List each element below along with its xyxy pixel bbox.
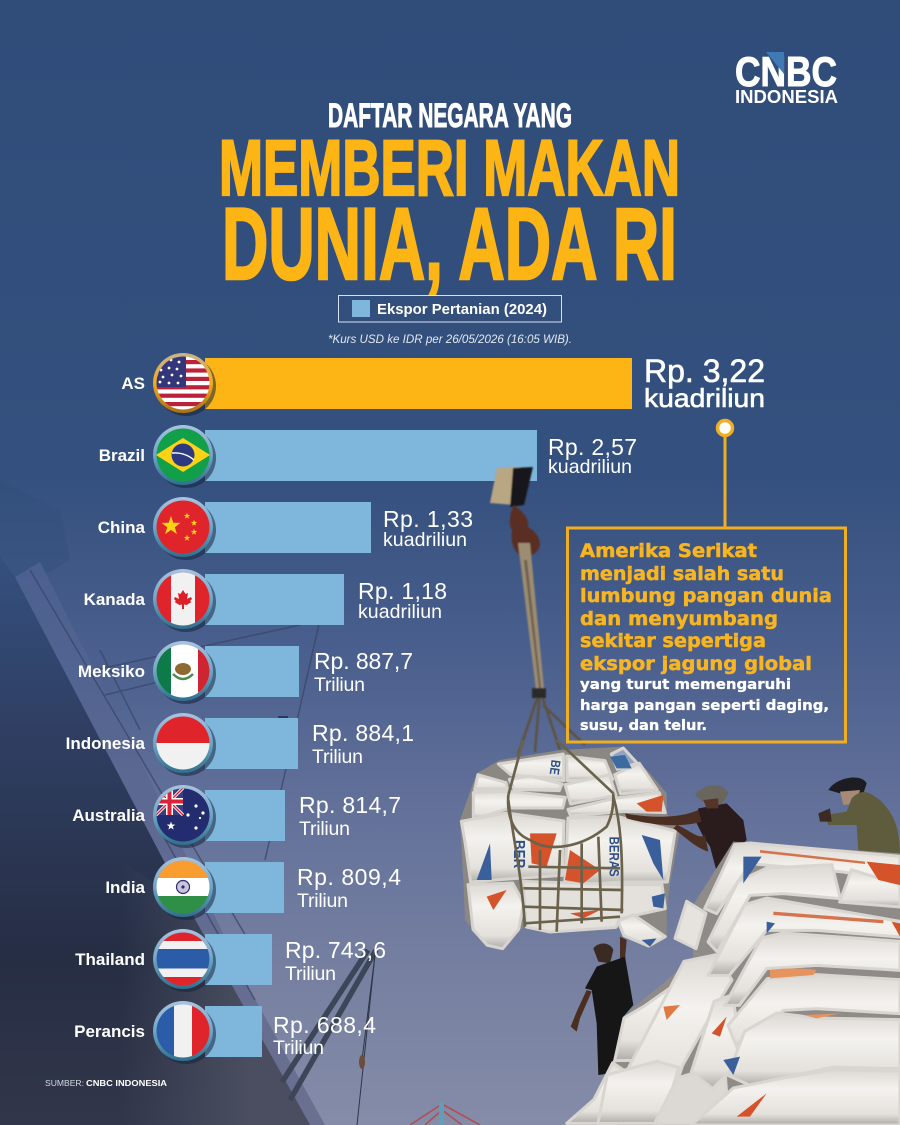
callout: United States note bbox=[568, 528, 846, 742]
values: other countries: Rp. 1,18 bbox=[358, 578, 447, 604]
callout: United States note: ekspor jagung global bbox=[580, 653, 812, 675]
values: other countries: Triliun bbox=[273, 1037, 324, 1059]
values: other countries: Triliun bbox=[285, 963, 336, 985]
title: DAFTAR NEGARA YANG bbox=[328, 97, 572, 135]
source line: SUMBER: bbox=[45, 1078, 84, 1088]
values: other countries: Rp. 814,7 bbox=[299, 792, 401, 818]
values: other countries: Rp. 809,4 bbox=[297, 864, 401, 890]
country labels bbox=[66, 374, 146, 1041]
values: other countries: Rp. 1,33 bbox=[383, 506, 473, 532]
country labels: Australia bbox=[72, 806, 146, 825]
values: other countries: Rp. 743,6 bbox=[285, 937, 386, 963]
values: other countries: kuadriliun bbox=[548, 456, 632, 478]
country labels: Thailand bbox=[75, 950, 145, 969]
country labels: Kanada bbox=[84, 590, 146, 609]
values: other countries: Triliun bbox=[297, 890, 348, 912]
flag: Thailand bbox=[153, 929, 216, 992]
callout: United States note: harga pangan seperti daging, bbox=[580, 698, 829, 714]
source line bbox=[45, 1078, 167, 1088]
country labels: China bbox=[98, 518, 146, 537]
bag printing: BERAS bbox=[606, 837, 622, 877]
flag: China bbox=[153, 497, 216, 560]
country labels: Brazil bbox=[99, 446, 145, 465]
country labels: Perancis bbox=[74, 1022, 145, 1041]
legend bbox=[338, 296, 562, 322]
worker: below load in black bbox=[571, 937, 633, 1075]
value: AS: kuadriliun bbox=[644, 383, 765, 413]
flag: United States bbox=[153, 353, 216, 416]
value: AS bbox=[644, 353, 765, 413]
country labels: India bbox=[105, 878, 146, 897]
bag printing bbox=[477, 755, 665, 947]
worker: centre with grey cap bbox=[625, 785, 747, 872]
logo: CNBC Indonesia: CNBC bbox=[735, 48, 837, 95]
values: other countries: Rp. 884,1 bbox=[312, 720, 414, 746]
values: other countries: kuadriliun bbox=[358, 601, 442, 623]
cargo net bbox=[508, 740, 623, 932]
flag: Australia bbox=[153, 785, 216, 848]
country labels: AS bbox=[121, 374, 145, 393]
values: other countries: Triliun bbox=[312, 746, 363, 768]
bag printing: BER bbox=[510, 840, 527, 868]
callout: United States note: sekitar sepertiga bbox=[580, 630, 766, 652]
logo: CNBC Indonesia: INDONESIA bbox=[735, 87, 838, 107]
photo: dock workers bbox=[571, 778, 900, 1075]
worker: right in khaki bbox=[818, 778, 900, 855]
callout: United States note: dan menyumbang bbox=[580, 608, 778, 630]
values: other countries: Triliun bbox=[314, 674, 365, 696]
country labels: Meksiko bbox=[78, 662, 145, 681]
values: other countries: Triliun bbox=[299, 818, 350, 840]
values: other countries: Rp. 2,57 bbox=[548, 434, 637, 460]
value: AS: Rp. 3,22 bbox=[644, 353, 765, 389]
bag printing: BE bbox=[547, 759, 564, 776]
values: other countries: kuadriliun bbox=[383, 529, 467, 551]
title: MEMBERI MAKAN bbox=[219, 123, 680, 212]
photo: hanging rice sack load bbox=[460, 740, 680, 950]
photo: crane hook and strap bbox=[490, 467, 585, 755]
exchange rate note: *Kurs USD ke IDR per 26/05/2026 (16:05 WIB). bbox=[328, 332, 572, 346]
photo: stacked rice sacks bbox=[567, 842, 900, 1125]
source line: CNBC INDONESIA bbox=[86, 1078, 167, 1088]
flag: Canada bbox=[153, 569, 216, 632]
title bbox=[219, 97, 680, 301]
country labels: Indonesia bbox=[66, 734, 146, 753]
background: ship hull and deck bbox=[0, 480, 325, 1125]
flag: Indonesia bbox=[153, 713, 216, 776]
callout connector bbox=[718, 420, 732, 528]
flag: Brazil bbox=[153, 425, 216, 488]
callout: United States note: susu, dan telur. bbox=[580, 718, 707, 734]
callout: United States note: menjadi salah satu bbox=[580, 563, 784, 585]
values: other countries: Rp. 688,4 bbox=[273, 1012, 376, 1038]
flag: Mexico bbox=[153, 641, 216, 704]
callout: United States note: Amerika Serikat bbox=[580, 540, 757, 562]
bar chart: export bars bbox=[205, 358, 632, 1057]
values: other countries: Rp. 887,7 bbox=[314, 648, 413, 674]
callout: United States note: lumbung pangan dunia bbox=[580, 585, 832, 607]
callout: United States note: yang turut memengaruhi bbox=[580, 677, 791, 693]
legend: Ekspor Pertanian (2024) bbox=[377, 302, 547, 318]
logo: CNBC Indonesia bbox=[735, 48, 838, 107]
flag: India bbox=[153, 857, 216, 920]
flag: France bbox=[153, 1001, 216, 1064]
values: other countries bbox=[273, 434, 637, 1059]
background: harbour cranes bbox=[282, 950, 480, 1125]
